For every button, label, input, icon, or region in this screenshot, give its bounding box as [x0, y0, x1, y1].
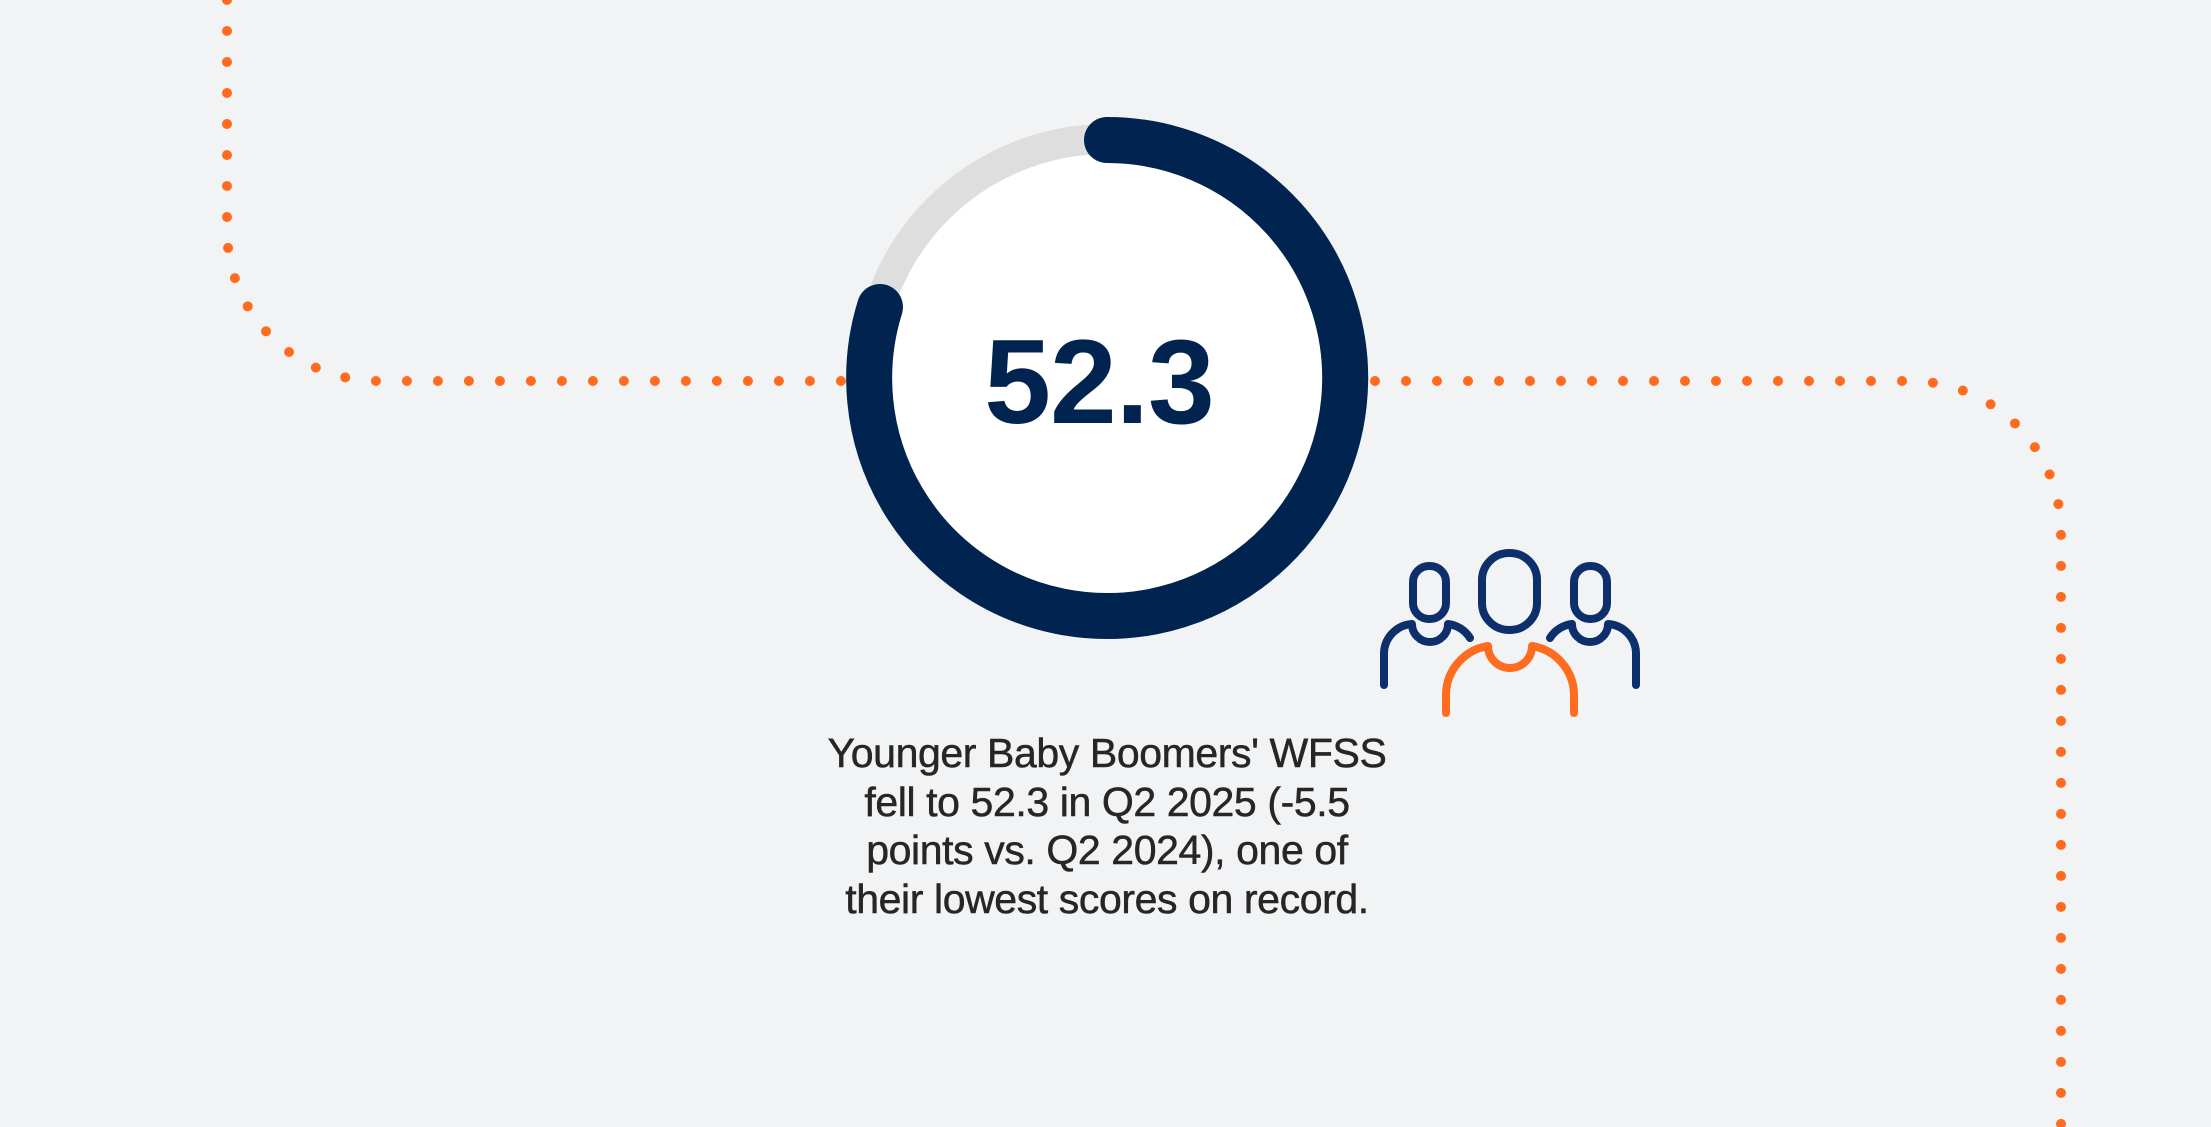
gauge: score ring: [868, 139, 1346, 617]
dotted connector left: [227, 0, 850, 381]
caption text: points vs. Q2 2024), one of: [866, 827, 1348, 873]
icon: group of people: [1384, 553, 1636, 713]
caption text: their lowest scores on record.: [845, 876, 1369, 922]
dotted connector right: [1375, 381, 2061, 1127]
caption text: Younger Baby Boomers' WFSS: [828, 730, 1386, 776]
score value: 52.3: [984, 315, 1214, 449]
caption text: [828, 730, 1386, 922]
caption text: fell to 52.3 in Q2 2025 (-5.5: [864, 778, 1350, 824]
